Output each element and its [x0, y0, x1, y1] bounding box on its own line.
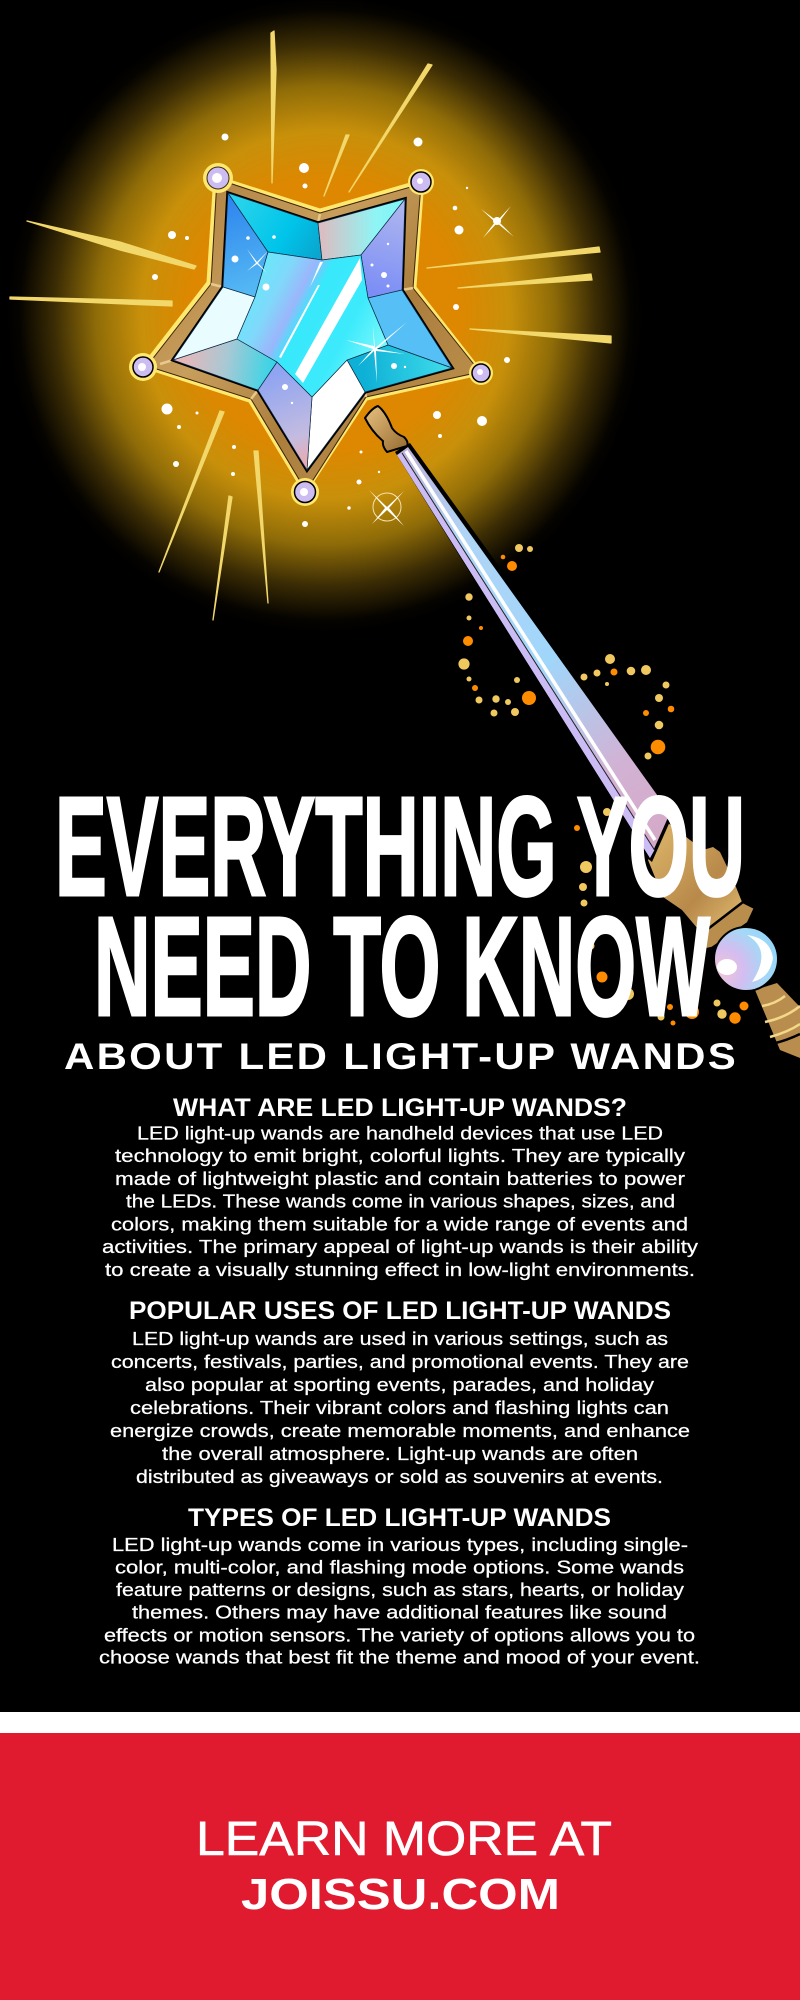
- pearl top right: [408, 169, 434, 195]
- handle ring: [703, 902, 755, 950]
- body text: energize crowds, create memorable moments, and enhance: [110, 1420, 690, 1441]
- body text: LED light-up wands are handheld devices that use LED: [137, 1122, 663, 1143]
- shaft lavender edge: [397, 453, 654, 858]
- gem glare stripes: [279, 258, 362, 383]
- wand shaft: [395, 443, 675, 862]
- glass orb: [714, 927, 778, 991]
- body text: effects or motion sensors. The variety of options allows you to: [104, 1624, 695, 1646]
- body text: to create a visually stunning effect in low-light environments.: [105, 1259, 695, 1280]
- handle cone: [648, 823, 742, 935]
- body text: color, multi-color, and flashing mode options. Some wands: [115, 1556, 684, 1578]
- body text: also popular at sporting events, parades, and holiday: [145, 1374, 655, 1395]
- sparkle with ring lower: [369, 490, 404, 526]
- body text: themes. Others may have additional features like sound: [132, 1602, 667, 1622]
- gem sparkle dots: [232, 235, 406, 404]
- section: what are wands: [102, 1094, 699, 1280]
- gem sparkle large: [346, 322, 407, 383]
- body text: made of lightweight plastic and contain batteries to power: [115, 1168, 685, 1189]
- body text: [110, 1328, 690, 1487]
- body text: feature patterns or designs, such as stars, hearts, or holiday: [116, 1579, 685, 1600]
- pearl right: [469, 361, 493, 385]
- body text: concerts, festivals, parties, and promotional events. They are: [111, 1351, 689, 1372]
- frame mitre highlights: [160, 214, 413, 399]
- title: [55, 767, 745, 1045]
- white divider band: [0, 1712, 800, 1733]
- section: types: [99, 1504, 700, 1668]
- call to action panel: [0, 1733, 800, 2000]
- body text: the LEDs. These wands come in various shapes, sizes, and: [126, 1190, 675, 1212]
- body text: distributed as giveaways or sold as souvenirs at events.: [136, 1466, 663, 1487]
- golden light rays: [10, 31, 611, 620]
- body text: the overall atmosphere. Light-up wands are often: [162, 1443, 638, 1464]
- heading: POPULAR USES OF LED LIGHT-UP WANDS: [129, 1297, 671, 1325]
- body text: LED light-up wands are used in various settings, such as: [132, 1328, 668, 1349]
- section: popular uses: [110, 1297, 690, 1487]
- body text: choose wands that best fit the theme and mood of your event.: [99, 1646, 700, 1668]
- wand handle: [648, 823, 800, 1058]
- body text: [99, 1534, 700, 1668]
- gem sparkle small: [247, 249, 268, 273]
- heading: TYPES OF LED LIGHT-UP WANDS: [188, 1504, 611, 1532]
- body text: colors, making them suitable for a wide range of events and: [111, 1214, 688, 1234]
- body text: LED light-up wands come in various types, including single-: [112, 1534, 688, 1555]
- white sparkle dots around star: [152, 134, 510, 527]
- collar: [365, 406, 408, 452]
- lower grip: [755, 983, 800, 1058]
- body text: activities. The primary appeal of light-up wands is their ability: [102, 1236, 699, 1257]
- gem facets: [173, 193, 452, 470]
- learn more text: LEARN MORE AT: [196, 1813, 612, 1866]
- body text: celebrations. Their vibrant colors and flashing lights can: [130, 1397, 669, 1418]
- pearl left: [129, 353, 157, 381]
- inner black line: [173, 193, 452, 470]
- body text: [102, 1122, 699, 1280]
- body text: technology to emit bright, colorful lights. They are typically: [115, 1145, 686, 1166]
- shaft white strip: [406, 451, 655, 840]
- website: JOISSU.COM: [241, 1870, 560, 1919]
- shaft dark line: [402, 453, 654, 850]
- yellow outline: [141, 175, 484, 495]
- pearl top left: [203, 163, 233, 193]
- heading: WHAT ARE LED LIGHT-UP WANDS?: [173, 1094, 627, 1122]
- orange and yellow magic particles: [458, 544, 748, 1026]
- pearl bottom: [291, 478, 319, 506]
- star wand head: [129, 163, 493, 506]
- subtitle: ABOUT LED LIGHT-UP WANDS: [64, 1036, 738, 1077]
- gold frame: [147, 179, 480, 491]
- glow behind star: [0, 0, 660, 640]
- sparkle top right: [481, 206, 514, 238]
